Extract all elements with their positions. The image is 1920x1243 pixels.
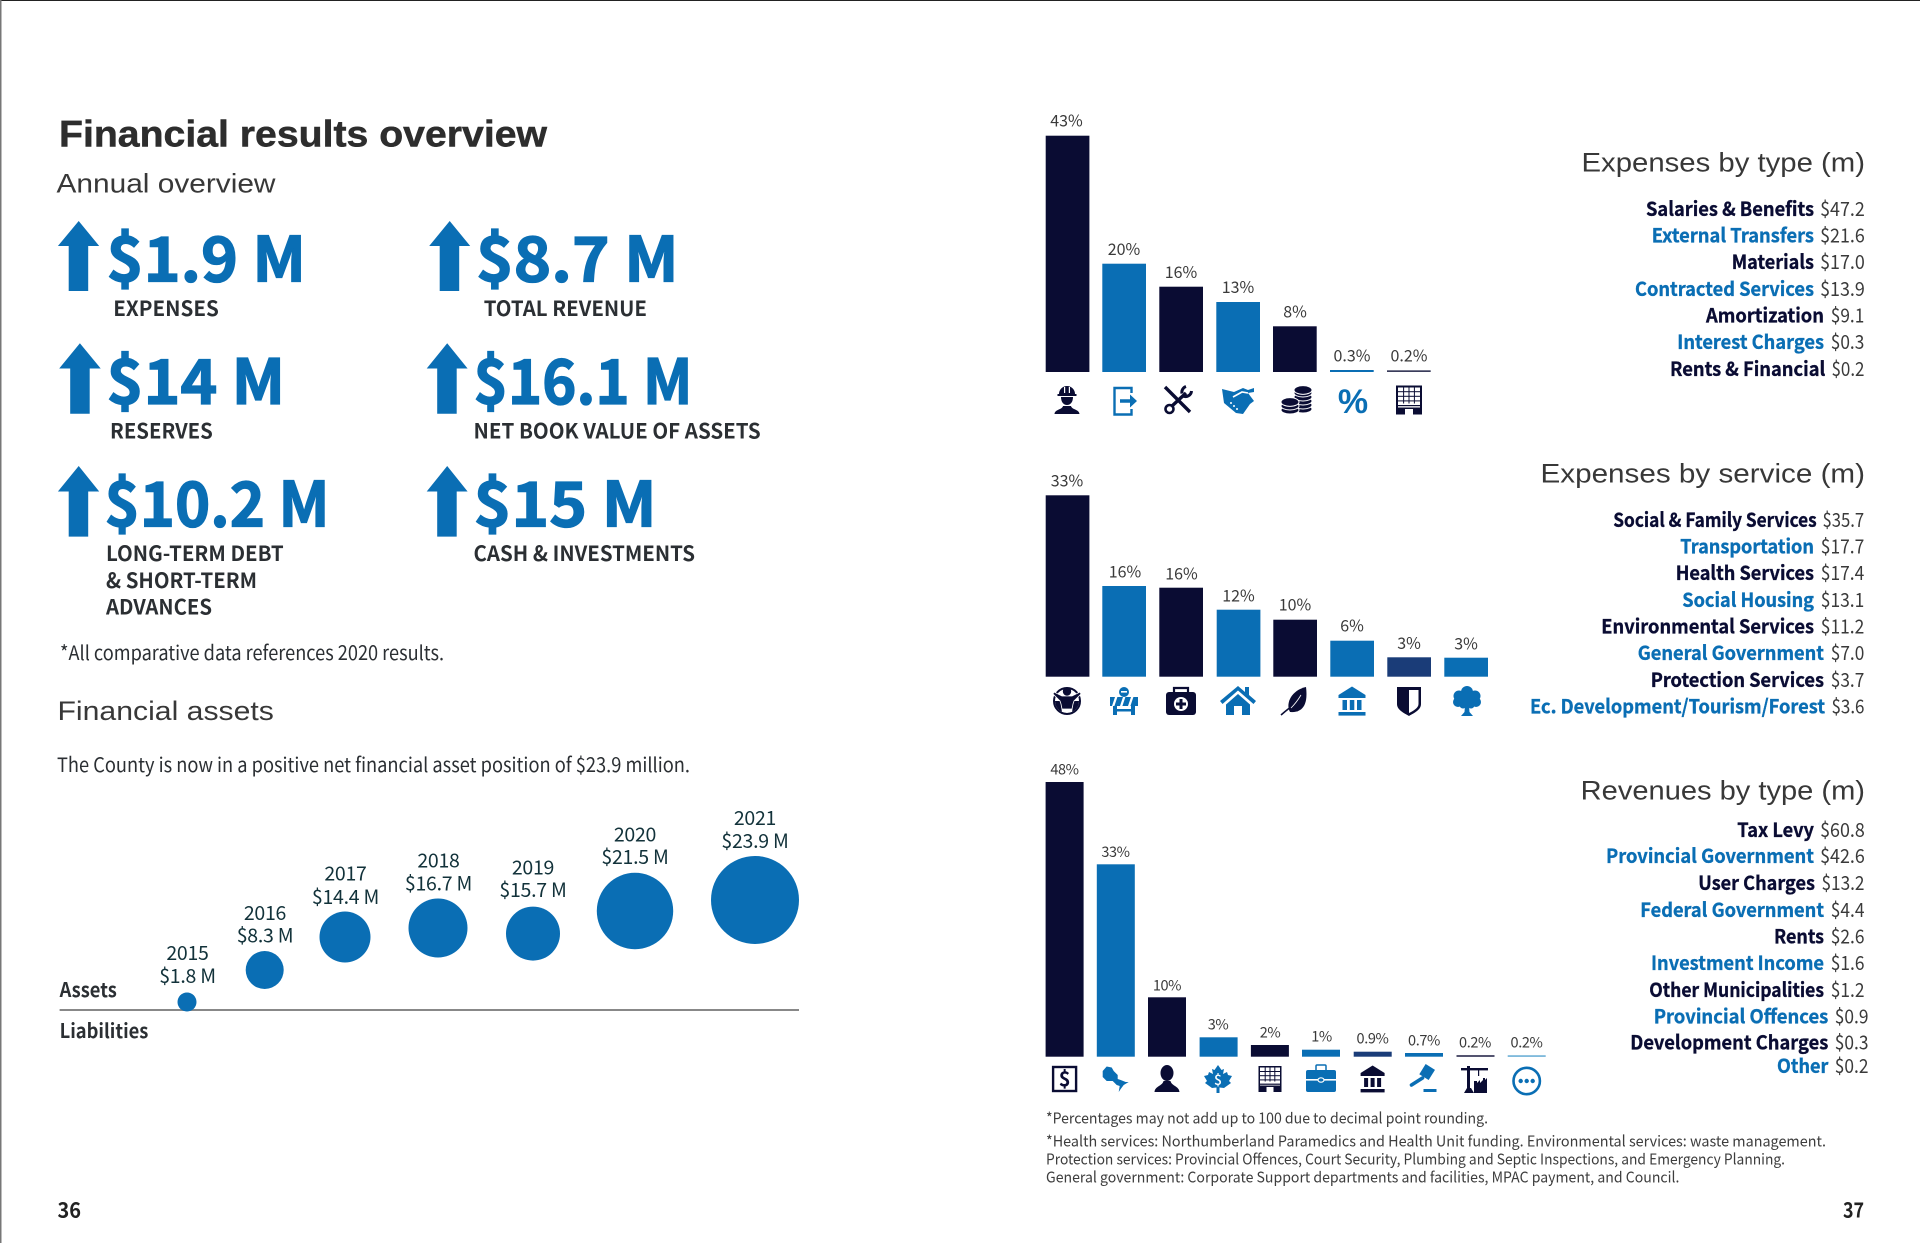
icon: briefcase xyxy=(1306,1065,1336,1092)
icon: person in circle xyxy=(1053,687,1081,714)
legend: expenses by service: $11.2 xyxy=(1821,611,1864,640)
legend: expenses by service: Health Services xyxy=(1676,557,1814,586)
bar chart: expenses by type: 16% xyxy=(1165,259,1198,283)
bar chart: expenses by service: 12% xyxy=(1222,582,1255,606)
legend: revenues by type xyxy=(1581,775,1868,1079)
legend: expenses by service: General Government xyxy=(1638,637,1824,666)
legend: expenses by service: $17.7 xyxy=(1821,531,1864,560)
title: Financial results overview xyxy=(59,114,547,155)
icon: house xyxy=(1220,686,1256,715)
legend: revenues by type: Tax Levy xyxy=(1737,814,1814,843)
bar chart: expenses by type: 20% xyxy=(1108,236,1141,260)
legend: expenses by service: $3.6 xyxy=(1831,691,1864,720)
metric: total revenue: $8.7 M xyxy=(476,209,678,299)
footnotes: *Health services: Northumberland Paramedics and Health Unit funding. Environmental services: waste management. xyxy=(1046,1131,1826,1152)
bubble: 2021 xyxy=(711,802,799,944)
legend: revenues by type: $4.4 xyxy=(1831,894,1865,923)
icon: Ontario map xyxy=(1103,1066,1129,1092)
icon: person xyxy=(1154,1065,1180,1092)
icon: shield xyxy=(1397,687,1421,716)
legend: revenues by type: Development Charges xyxy=(1630,1026,1828,1055)
legend: revenues by type: $0.9 xyxy=(1835,1001,1868,1029)
bubble: 2016: $8.3 M xyxy=(237,920,293,948)
legend: expenses by type: $21.6 xyxy=(1820,219,1865,248)
legend: expenses by type: Contracted Services xyxy=(1635,273,1814,302)
bar chart: expenses by type: 8% xyxy=(1283,299,1307,323)
icon: coins xyxy=(1281,386,1312,414)
legend: expenses by service: Social Housing xyxy=(1682,584,1814,613)
legend: expenses by service: $35.7 xyxy=(1822,504,1864,533)
legend: revenues by type: Rents xyxy=(1774,921,1824,950)
metric: net book value of assets: NET BOOK VALUE OF ASSETS xyxy=(474,415,761,445)
heading: annual overview: Annual overview xyxy=(56,169,276,199)
legend: expenses by service: Ec. Development/Tourism/Forest xyxy=(1530,691,1825,720)
page number 36: 36 xyxy=(58,1194,81,1224)
legend: revenues by type: $1.2 xyxy=(1831,974,1864,1003)
metric: cash and investments xyxy=(427,455,695,568)
bar chart: expenses by service: 3% xyxy=(1454,630,1478,654)
footnotes: Protection services: Provincial Offences, Court Security, Plumbing and Septic Inspections, and Emergency Planning. xyxy=(1046,1149,1785,1170)
bubble: 2018: $16.7 M xyxy=(405,867,472,896)
legend: expenses by type: Salaries & Benefits xyxy=(1646,193,1814,222)
chart: financial assets bubbles: Assets xyxy=(59,974,117,1003)
legend: expenses by service: $17.4 xyxy=(1821,557,1864,586)
legend: revenues by type: $1.6 xyxy=(1831,947,1864,976)
metric: total revenue: TOTAL REVENUE xyxy=(484,293,647,323)
icon: tax dollar xyxy=(1053,1063,1076,1092)
metric: expenses: $1.9 M xyxy=(106,209,306,299)
chart: financial assets bubbles: Liabilities xyxy=(60,1015,148,1044)
bar chart: revenues by type: 33% xyxy=(1101,841,1130,862)
icon: road barrier xyxy=(1110,687,1138,715)
legend: revenues by type: $0.3 xyxy=(1835,1026,1868,1055)
icon: building xyxy=(1396,386,1422,414)
bubble: 2021: $23.9 M xyxy=(721,825,789,854)
icon: tree xyxy=(1453,686,1481,716)
metric: cash and investments: $15 M xyxy=(474,455,656,545)
legend: expenses by type: $17.0 xyxy=(1820,246,1865,275)
bar chart: revenues by type: 3% xyxy=(1208,1013,1228,1034)
bubble: 2020 xyxy=(597,818,673,949)
metric: long-term debt: & SHORT-TERM xyxy=(106,565,257,595)
icon: medical kit xyxy=(1166,688,1196,715)
legend: expenses by service: Environmental Services xyxy=(1601,611,1814,640)
bubble: 2016: 2016 xyxy=(244,897,286,926)
legend: expenses by type: $13.9 xyxy=(1820,273,1865,302)
bar chart: revenues by type: 1% xyxy=(1311,1026,1332,1047)
legend: revenues by type: Other xyxy=(1777,1050,1829,1079)
metric: long-term debt: $10.2 M xyxy=(104,455,330,545)
bar chart: expenses by service: 16% xyxy=(1165,560,1198,584)
icon: tools xyxy=(1165,386,1192,413)
bar chart: revenues by type: 48% xyxy=(1050,758,1079,779)
legend: expenses by service: $3.7 xyxy=(1831,664,1864,693)
metric: long-term debt xyxy=(58,455,330,621)
bar chart: expenses by service: 33% xyxy=(1051,468,1084,492)
bar chart: revenues by type: 0.7% xyxy=(1408,1029,1440,1050)
bubble: 2020: $21.5 M xyxy=(601,841,669,870)
heading: financial assets: Financial assets xyxy=(58,696,274,726)
legend: revenues by type: $13.2 xyxy=(1821,867,1864,896)
icon: exit transfer xyxy=(1114,388,1137,414)
legend: revenues by type: Revenues by type (m) xyxy=(1581,775,1865,805)
bar chart: revenues by type: 2% xyxy=(1260,1022,1280,1043)
bubble: 2020: 2020 xyxy=(614,818,656,847)
metric: reserves: RESERVES xyxy=(110,415,213,445)
icon: percent: % xyxy=(1338,383,1368,421)
bubble: 2019 xyxy=(499,852,567,961)
legend: expenses by type: External Transfers xyxy=(1652,219,1814,248)
icon: gavel xyxy=(1412,1064,1436,1092)
legend: revenues by type: Provincial Government xyxy=(1606,840,1814,869)
icon: tax dollar: $ xyxy=(1059,1063,1071,1092)
page number 37: 37 xyxy=(1843,1194,1864,1224)
legend: expenses by type: $0.2 xyxy=(1831,353,1864,382)
icon: crane and factory xyxy=(1461,1066,1488,1093)
icon: maple leaf dollar: $ xyxy=(1214,1070,1222,1090)
footnotes xyxy=(1046,1107,1826,1187)
footnotes: *Percentages may not add up to 100 due to decimal point rounding. xyxy=(1046,1107,1488,1128)
icon: maple leaf dollar xyxy=(1204,1065,1232,1093)
bar chart: expenses by service: 3% xyxy=(1397,630,1421,654)
legend: revenues by type: Provincial Offences xyxy=(1654,1001,1828,1029)
footnote: comparative data: *All comparative data references 2020 results. xyxy=(60,637,444,666)
icon: bank xyxy=(1338,686,1366,716)
legend: expenses by type: Amortization xyxy=(1705,300,1824,329)
legend: expenses by service: $7.0 xyxy=(1831,637,1864,666)
legend: expenses by service xyxy=(1530,458,1865,720)
bubble: 2019: $15.7 M xyxy=(499,874,567,903)
panel: annual overview metrics xyxy=(58,209,761,621)
legend: expenses by service: Expenses by service (m) xyxy=(1540,458,1865,488)
legend: revenues by type: Investment Income xyxy=(1651,947,1824,976)
bubble: 2018: 2018 xyxy=(417,844,460,874)
metric: net book value of assets xyxy=(427,332,761,445)
bubble: 2016 xyxy=(237,897,293,989)
icon: leaf xyxy=(1281,687,1306,715)
legend: revenues by type: $0.2 xyxy=(1835,1050,1868,1079)
bar chart: expenses by type: 13% xyxy=(1222,274,1255,298)
metric: expenses xyxy=(58,209,306,323)
bar chart: expenses by type xyxy=(1046,108,1431,421)
footnotes: General government: Corporate Support departments and facilities, MPAC payment, and Council. xyxy=(1046,1166,1679,1187)
icon: bank xyxy=(1361,1066,1385,1092)
legend: expenses by type: Expenses by type (m) xyxy=(1582,148,1865,178)
legend: expenses by service: Transportation xyxy=(1680,531,1814,560)
metric: cash and investments: CASH & INVESTMENTS xyxy=(474,538,695,568)
bar chart: expenses by service xyxy=(1046,468,1488,716)
legend: expenses by type: Rents & Financial xyxy=(1670,353,1825,382)
bar chart: revenues by type: 10% xyxy=(1153,974,1181,995)
bubble: 2015 xyxy=(159,937,216,1012)
legend: expenses by service: Protection Services xyxy=(1651,664,1824,693)
bubble: 2015: $1.8 M xyxy=(159,960,216,989)
legend: expenses by service: Social & Family Services xyxy=(1613,504,1817,533)
icon: worker xyxy=(1054,386,1080,414)
metric: long-term debt: LONG-TERM DEBT xyxy=(106,538,284,568)
legend: expenses by type: $0.3 xyxy=(1831,326,1864,355)
legend: revenues by type: $42.6 xyxy=(1820,840,1865,869)
bubble: 2015: 2015 xyxy=(166,937,209,966)
metric: net book value of assets: $16.1 M xyxy=(474,332,692,422)
bubble: 2017: $14.4 M xyxy=(312,881,379,910)
bar chart: expenses by type: 0.2% xyxy=(1391,343,1428,367)
metric: reserves xyxy=(59,332,285,445)
bar chart: expenses by service: 16% xyxy=(1109,558,1142,582)
bar chart: revenues by type: 0.2% xyxy=(1511,1032,1542,1053)
bar chart: revenues by type: 0.2% xyxy=(1459,1032,1491,1053)
legend: expenses by type: $9.1 xyxy=(1831,300,1864,329)
legend: revenues by type: $60.8 xyxy=(1820,814,1865,843)
icon: more dots xyxy=(1514,1068,1540,1094)
legend: revenues by type: Federal Government xyxy=(1640,894,1824,923)
bubble: 2017: 2017 xyxy=(324,858,367,887)
legend: revenues by type: User Charges xyxy=(1698,867,1815,896)
bar chart: expenses by service: 10% xyxy=(1279,592,1312,616)
bubble: 2021: 2021 xyxy=(734,802,776,831)
bubble: 2019: 2019 xyxy=(512,852,554,881)
metric: total revenue xyxy=(429,209,678,323)
bar chart: expenses by service: 6% xyxy=(1340,613,1364,637)
bar chart: expenses by type: 43% xyxy=(1050,108,1083,132)
bar chart: revenues by type xyxy=(1046,758,1546,1094)
legend: expenses by type: $47.2 xyxy=(1820,193,1865,222)
legend: expenses by type: Interest Charges xyxy=(1677,326,1824,355)
chart: financial assets bubbles xyxy=(59,802,799,1044)
metric: expenses: EXPENSES xyxy=(113,293,219,323)
bubble: 2018 xyxy=(405,844,472,958)
bubble: 2017 xyxy=(312,858,379,962)
icon: building xyxy=(1258,1066,1282,1092)
text: net financial asset statement: The County is now in a positive net financial asset position of $23.9 million. xyxy=(57,749,690,778)
legend: revenues by type: $2.6 xyxy=(1831,921,1864,950)
legend: expenses by type: Materials xyxy=(1732,246,1814,275)
legend: expenses by service: $13.1 xyxy=(1821,584,1864,613)
legend: revenues by type: Other Municipalities xyxy=(1649,974,1824,1003)
legend: expenses by type xyxy=(1582,148,1865,382)
icon: handshake xyxy=(1222,388,1254,414)
metric: reserves: $14 M xyxy=(106,332,285,422)
bar chart: revenues by type: 0.9% xyxy=(1357,1028,1388,1049)
metric: long-term debt: ADVANCES xyxy=(105,591,212,621)
bar chart: expenses by type: 0.3% xyxy=(1334,343,1371,367)
